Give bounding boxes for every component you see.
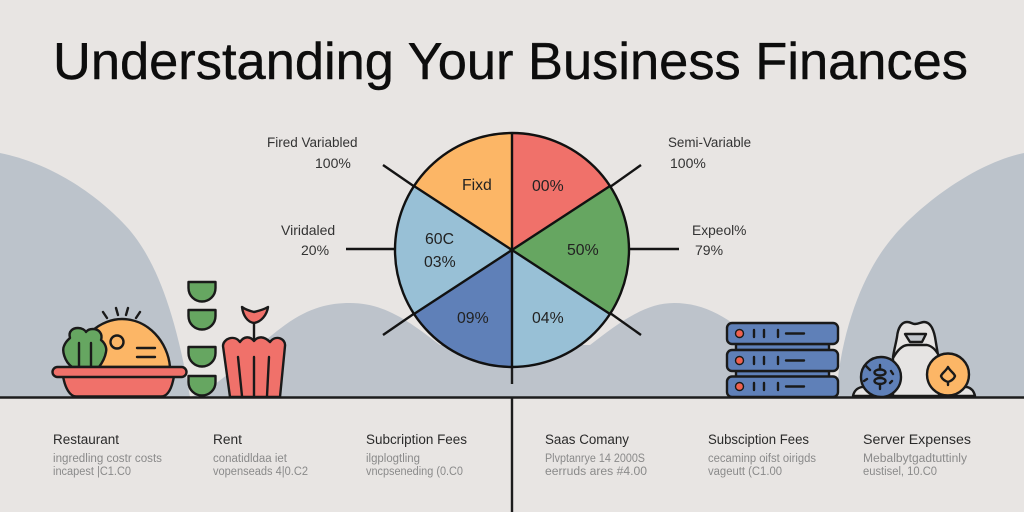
food dome — [92, 319, 170, 367]
column: saas company: eerruds ares #4.00 — [545, 466, 647, 478]
column: saas company: Saas Comany — [545, 432, 629, 447]
column: restaurant: ingredling costr costs — [53, 453, 162, 465]
column: server expenses — [863, 432, 971, 478]
pie value labels: 60C — [425, 231, 454, 248]
callout labels: left — [267, 135, 358, 258]
figure collar — [905, 334, 926, 342]
callout labels: right: Semi-Variable — [668, 135, 751, 150]
icon: stacked green cups — [188, 282, 216, 396]
callout labels: left: Viridaled — [281, 222, 335, 238]
steam rays — [103, 308, 140, 318]
callout labels: right: 79% — [695, 242, 723, 258]
figure feet — [853, 387, 975, 396]
icon: server stack — [727, 323, 838, 397]
callout labels: left: 20% — [301, 242, 329, 258]
pie slice: light blue right — [512, 250, 610, 367]
pie value labels: 09% — [457, 310, 489, 327]
column: rent: Rent — [213, 432, 242, 447]
column: saas company: Plvptanrye 14 2000S — [545, 453, 645, 465]
pie slice: red — [512, 133, 610, 250]
column: subscription fees left: Subcription Fees — [366, 432, 467, 447]
pie value labels — [424, 177, 599, 327]
column: rent — [213, 432, 308, 478]
icon: rent plant pot — [223, 307, 285, 397]
bowl body — [63, 376, 174, 396]
pie slice: green — [512, 186, 629, 314]
column: server expenses: Mebalbytgadtuttinly — [863, 453, 967, 465]
callout labels: right — [668, 135, 751, 258]
column: subscription fees left: ilgplogtling — [366, 453, 420, 465]
pie value labels: 03% — [424, 254, 456, 271]
pie value labels: Fixd — [462, 177, 492, 194]
column: restaurant — [53, 432, 162, 478]
column: subscription fees right: Subsciption Fees — [708, 432, 809, 447]
pie value labels: 50% — [567, 242, 599, 259]
title: Understanding Your Business Finances — [53, 33, 968, 91]
pie slice: light blue left — [395, 186, 512, 314]
pie value labels: 04% — [532, 310, 564, 327]
icon: restaurant food bowl — [52, 308, 186, 396]
column: subscription fees right: vageutt (C1.00 — [708, 466, 782, 478]
lettuce — [63, 328, 106, 367]
column: subscription fees left — [366, 432, 467, 478]
background hill: far left — [0, 153, 190, 397]
column: saas company — [545, 432, 647, 478]
column: subscription fees right — [708, 432, 816, 478]
callout labels: left: 100% — [315, 155, 351, 171]
pie value labels: 00% — [532, 178, 564, 195]
orange coin — [927, 354, 969, 396]
background hills: centre band behind the pie — [190, 303, 838, 397]
icon: server expenses figure with coins — [853, 322, 975, 397]
figure head — [893, 322, 938, 357]
callout labels: left: Fired Variabled — [267, 135, 358, 150]
column: restaurant: incapest |C1.C0 — [53, 466, 131, 478]
pie outlines — [395, 133, 629, 367]
callout labels: right: 100% — [670, 155, 706, 171]
blue coin — [861, 357, 901, 397]
column: rent: conatidldaa iet — [213, 453, 288, 465]
baseline and centre divider — [0, 366, 1024, 512]
column: server expenses: Server Expenses — [863, 432, 971, 447]
column: restaurant: Restaurant — [53, 432, 119, 447]
pie leader lines — [346, 165, 679, 335]
figure body — [893, 345, 939, 396]
pie chart — [346, 133, 679, 367]
column: subscription fees right: cecaminp oifst oirigds — [708, 453, 816, 465]
bowl rim — [52, 367, 186, 377]
column: subscription fees left: vncpseneding (0.C0 — [366, 466, 463, 478]
pie slice: dark blue — [414, 250, 512, 367]
pie slice: fixed orange — [414, 133, 512, 250]
background hill: far right — [836, 153, 1024, 397]
callout labels: right: Expeol% — [692, 223, 746, 238]
column: rent: vopenseads 4|0.C2 — [213, 466, 308, 478]
column: server expenses: eustisel, 10.C0 — [863, 466, 937, 478]
